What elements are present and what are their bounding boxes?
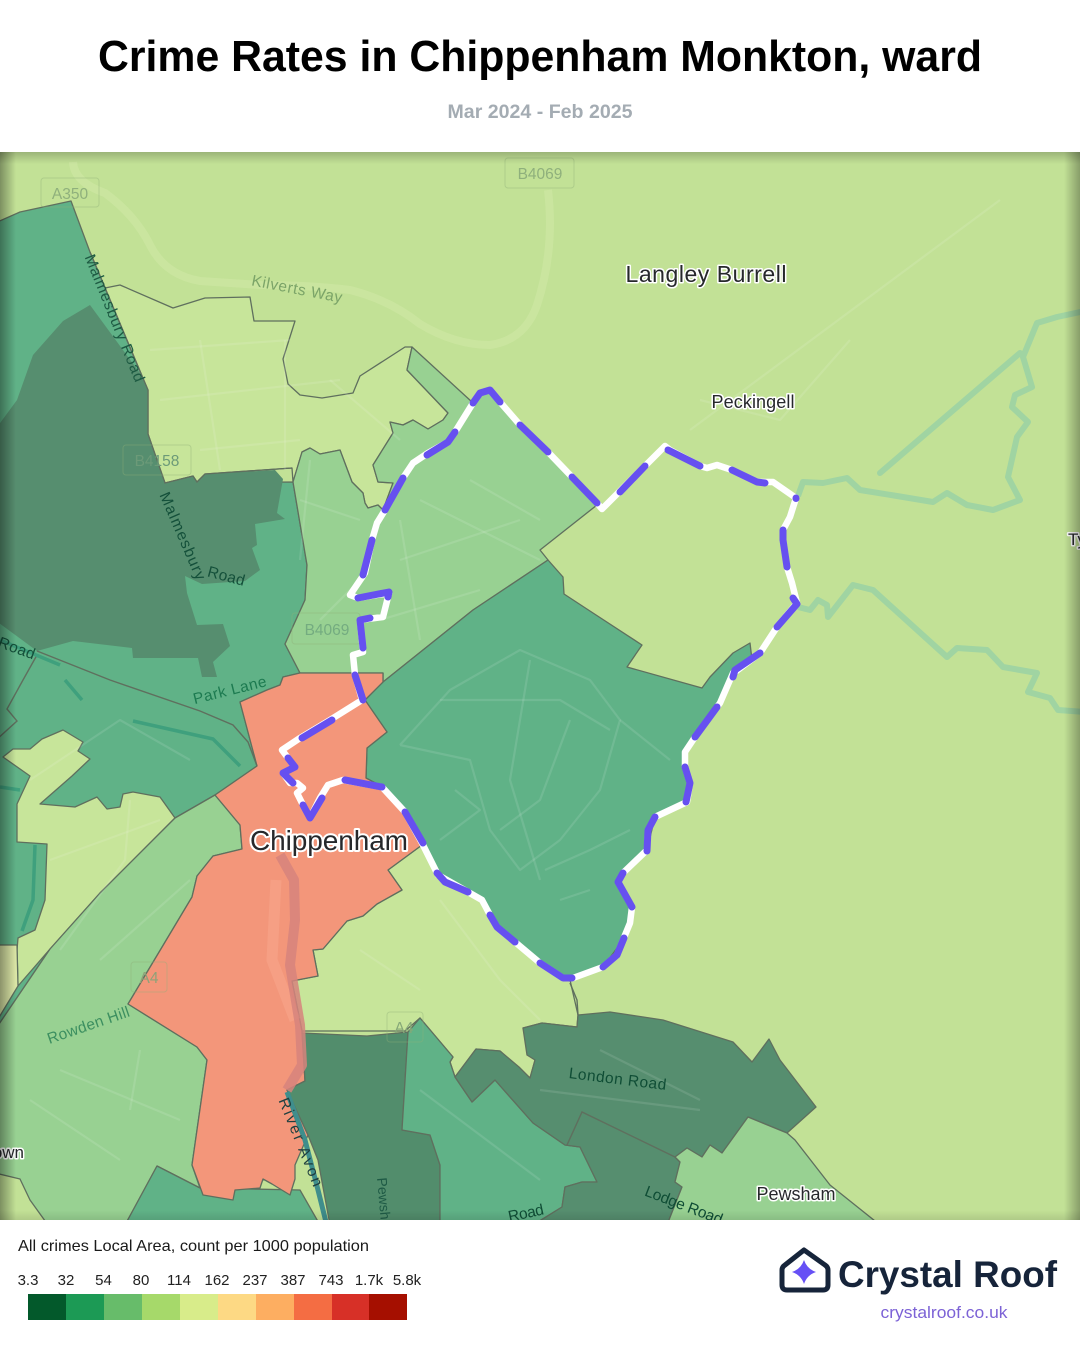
legend scale labels: 54: [95, 1272, 112, 1289]
legend scale labels: 80: [133, 1272, 149, 1289]
road badge: A4 east: [387, 1012, 423, 1042]
area: north of ward mid green: [285, 347, 597, 682]
river east of ward: south branch: [798, 585, 1080, 712]
river through town: [280, 855, 302, 1090]
road badge: B4158: [123, 445, 191, 475]
street label: Lodge Road: Lodge Road: [642, 1183, 725, 1228]
legend scale labels: 32: [58, 1272, 74, 1289]
legend title: All crimes Local Area, count per 1000 population: [18, 1238, 369, 1255]
street label: Pewsham Road: Pewsham Road: [374, 1177, 399, 1277]
area: north-west dark green: [0, 305, 285, 677]
street label: London Road: London Road: [568, 1065, 667, 1094]
area: west medium green: [0, 201, 307, 1030]
road badge: B4069 south: B4069: [305, 622, 349, 639]
street label: Kilverts Way: Kilverts Way: [250, 272, 344, 307]
website url: crystalroof.co.uk: [880, 1303, 1008, 1322]
area: south-centre medium green: [402, 1018, 597, 1225]
area: south lime: [292, 845, 578, 1078]
area: south-west mid green: [0, 795, 242, 1225]
road badge: B4069 north: [505, 158, 574, 188]
main road light corridor: [73, 162, 550, 345]
street label: Park Lane: Park Lane: [191, 673, 268, 708]
legend scale labels: 1.7k: [355, 1272, 384, 1289]
legend scale labels: 387: [280, 1272, 306, 1289]
legend scale labels: 3.3: [18, 1272, 38, 1289]
ward boundary: purple dashes: [283, 390, 797, 978]
area: south dark green: [287, 1032, 440, 1225]
area: town centre orange, high crime: [128, 673, 422, 1200]
river east of ward: north branch: [798, 311, 1080, 510]
map background: lowest band area: [0, 152, 1080, 1220]
river avon lower: [287, 1092, 326, 1222]
road badge: A350: A350: [52, 186, 88, 203]
road badge: A4 west: [131, 962, 167, 992]
legend scale labels: [18, 1272, 422, 1289]
town road through orange area: [272, 880, 295, 1020]
area: north-west lime: [105, 285, 448, 510]
area: west lime blob: [3, 730, 175, 986]
area: south-west corner lime: [0, 1174, 46, 1220]
street label: Rowden Hill: Rowden Hill: [45, 1004, 132, 1048]
subtitle: date range: Mar 2024 - Feb 2025: [448, 102, 633, 123]
ward boundary: white line: [282, 390, 797, 978]
street label: Malmesbury Road north: Malmesbury Road: [81, 252, 148, 385]
road badge: B4069 south: [292, 613, 360, 644]
street label: Road: Road: [206, 564, 247, 590]
place label: Peckingell: Peckingell: [712, 392, 794, 412]
area: Pewsham mid green: [667, 1117, 880, 1225]
legend scale labels: 237: [242, 1272, 268, 1289]
river east of ward: straight channel: [880, 353, 1020, 473]
place label: Chippenham: Chippenham: [250, 825, 408, 856]
area: far-west tan strip: [0, 945, 18, 1024]
legend scale labels: 5.8k: [393, 1272, 422, 1289]
legend scale labels: 743: [318, 1272, 344, 1289]
area: London Road dark green: [455, 1012, 816, 1225]
icon: house with star: [782, 1250, 828, 1290]
area boundary lines: [0, 651, 675, 1157]
area: south medium green strip: [125, 1166, 320, 1225]
streams on west side: [0, 640, 240, 931]
place label: Langley Burrell: Langley Burrell: [626, 261, 786, 287]
legend scale labels: 162: [204, 1272, 230, 1289]
legend scale labels: 114: [167, 1272, 191, 1289]
logo wordmark: Crystal Roof: [838, 1254, 1058, 1295]
road badge: A4 west: A4: [140, 970, 159, 987]
legend: [18, 1238, 422, 1320]
road badge: A350: [41, 178, 99, 207]
street label: Malmesbury: Malmesbury: [156, 490, 209, 583]
road badge: B4069 north: B4069: [518, 166, 562, 183]
legend colour swatches: [28, 1294, 407, 1320]
title: Crime Rates in Chippenham Monkton, ward: [98, 33, 982, 81]
street label: Road south: Road: [507, 1202, 545, 1226]
road badge: B4158: B4158: [135, 453, 179, 470]
road badge: A4 east: A4: [395, 1020, 414, 1037]
area: ward south medium green: [365, 560, 752, 980]
logo: Crystal Roof: [782, 1250, 1058, 1322]
place label: Pewsham: Pewsham: [756, 1184, 836, 1204]
street label: River Avon: River Avon: [275, 1096, 326, 1189]
